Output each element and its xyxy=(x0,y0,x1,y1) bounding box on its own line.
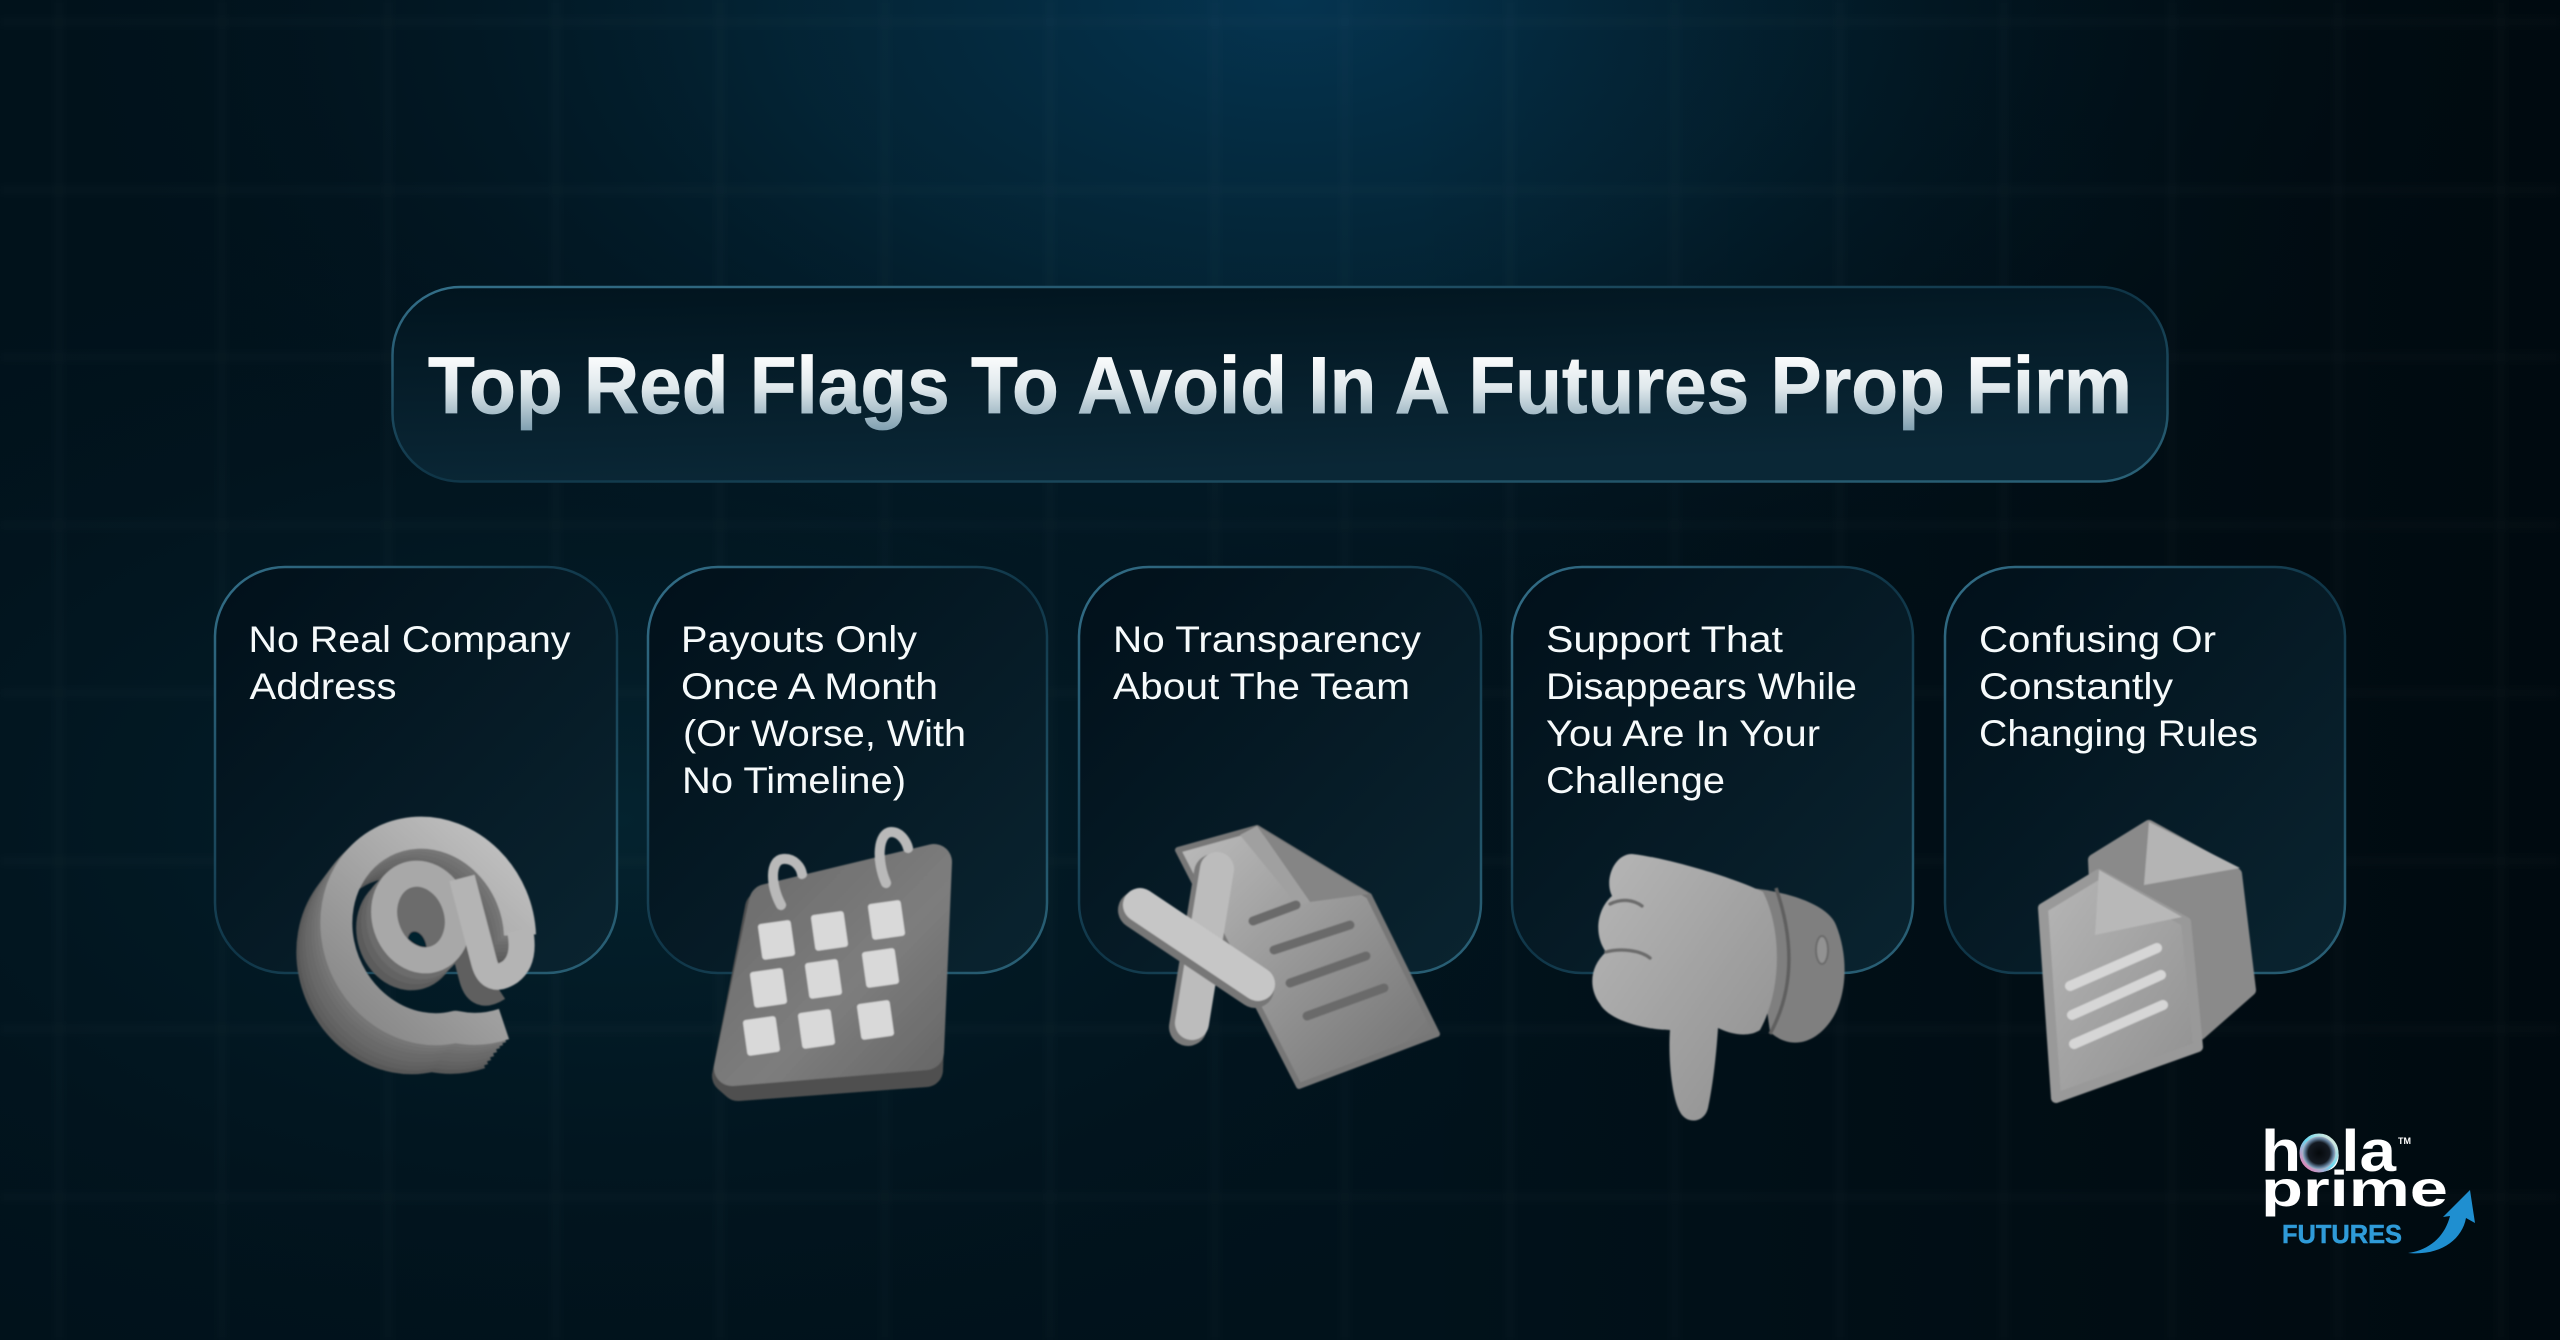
icon: at sign xyxy=(312,833,522,1058)
card text xyxy=(1113,619,1422,707)
panel: no real company address xyxy=(215,567,617,973)
card text: No Timeline) xyxy=(682,760,906,801)
document lines xyxy=(1253,905,1384,1016)
card text: About The Team xyxy=(1113,666,1410,707)
panel: payouts only once a month xyxy=(648,567,1047,973)
document lines xyxy=(2070,948,2163,1044)
finger creases xyxy=(1606,900,1650,958)
panel: no transparency about the team xyxy=(1079,567,1481,973)
title: Top Red Flags To Avoid In A Futures Prop Firm xyxy=(428,341,2132,431)
calendar day squares xyxy=(743,900,905,1056)
card text xyxy=(1546,619,1857,801)
card text xyxy=(681,619,966,801)
logo wordmark second line: prime xyxy=(2261,1161,2448,1217)
card text: Disappears While xyxy=(1546,666,1857,707)
card text: No Real Company xyxy=(248,619,571,660)
card text: Address xyxy=(250,666,396,707)
panel: support that disappears xyxy=(1512,567,1913,973)
icon: document with x xyxy=(1137,826,1437,1086)
title panel xyxy=(392,287,2168,482)
card text: (Or Worse, With xyxy=(683,713,966,754)
card text: Challenge xyxy=(1546,760,1725,801)
logo xyxy=(2261,1119,2475,1253)
logo arrow xyxy=(2408,1190,2475,1253)
card text: Confusing Or xyxy=(1979,619,2216,660)
logo bubble xyxy=(2301,1135,2337,1171)
logo trademark: TM xyxy=(2398,1136,2411,1146)
calendar rings xyxy=(773,832,908,905)
card text xyxy=(248,619,571,707)
card text: No Transparency xyxy=(1113,619,1422,660)
logo wordmark: hola xyxy=(2261,1119,2397,1184)
icon: documents xyxy=(2043,822,2250,1098)
logo futures: FUTURES xyxy=(2282,1219,2402,1249)
icon: calendar xyxy=(729,832,934,1084)
card text: Constantly xyxy=(1979,666,2174,707)
panel: confusing or constantly changing rules xyxy=(1945,567,2345,973)
card text: Payouts Only xyxy=(681,619,918,660)
card text: Changing Rules xyxy=(1979,713,2258,754)
card text: Once A Month xyxy=(681,666,938,707)
card text: You Are In Your xyxy=(1546,713,1820,754)
card text xyxy=(1979,619,2258,754)
icon: thumbs down xyxy=(1592,854,1845,1121)
card text: Support That xyxy=(1546,619,1784,660)
